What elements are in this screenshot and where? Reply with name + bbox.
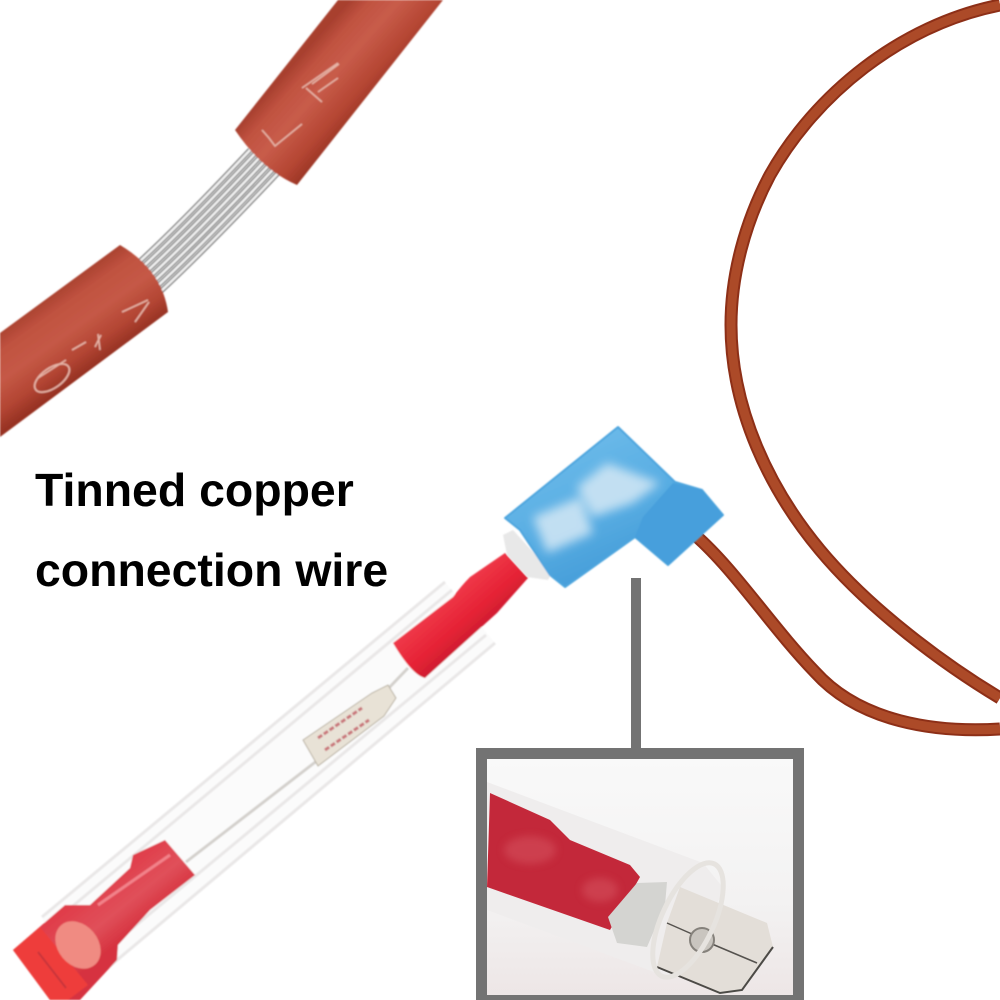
lower red terminal <box>13 840 195 1000</box>
tube in inset <box>487 782 634 838</box>
heading: connection wire <box>35 544 388 596</box>
darker neck <box>635 483 723 565</box>
inset frame <box>482 754 798 1000</box>
heading: Tinned copper <box>35 464 354 516</box>
photo: stripped wire close-up <box>0 0 443 437</box>
clear tube <box>42 582 495 997</box>
blade edge <box>657 947 773 993</box>
spade blade <box>657 887 773 993</box>
light reflections <box>533 463 660 553</box>
blade centre line <box>667 923 757 963</box>
pointer line <box>631 578 641 750</box>
upper wire markings <box>262 63 339 146</box>
crimped metal <box>608 882 667 947</box>
red crimp sleeve <box>487 793 640 930</box>
fuse lead wires <box>186 668 408 862</box>
blue body <box>505 427 723 587</box>
red sleeve and crimp <box>393 553 528 678</box>
inset photo <box>487 759 793 995</box>
lower wire markings <box>72 300 149 350</box>
blade hole <box>690 928 714 952</box>
photo: blue connector <box>503 427 723 587</box>
photo: fuse in clear tube <box>13 553 528 1000</box>
tube highlights <box>42 582 495 997</box>
exposed tinned strands <box>138 150 278 292</box>
inset: connector detail <box>482 754 798 1000</box>
photo: looped brown wire <box>695 5 1000 730</box>
metal tab <box>503 530 552 580</box>
tube end ring <box>650 860 726 980</box>
upper insulation <box>235 0 443 185</box>
sleeve mottling <box>504 836 618 902</box>
heading <box>35 464 388 596</box>
lower insulation <box>0 245 168 437</box>
wire lead to connector <box>695 535 1000 730</box>
thermal fuse body <box>303 685 396 766</box>
wire outer loop <box>731 5 1000 698</box>
